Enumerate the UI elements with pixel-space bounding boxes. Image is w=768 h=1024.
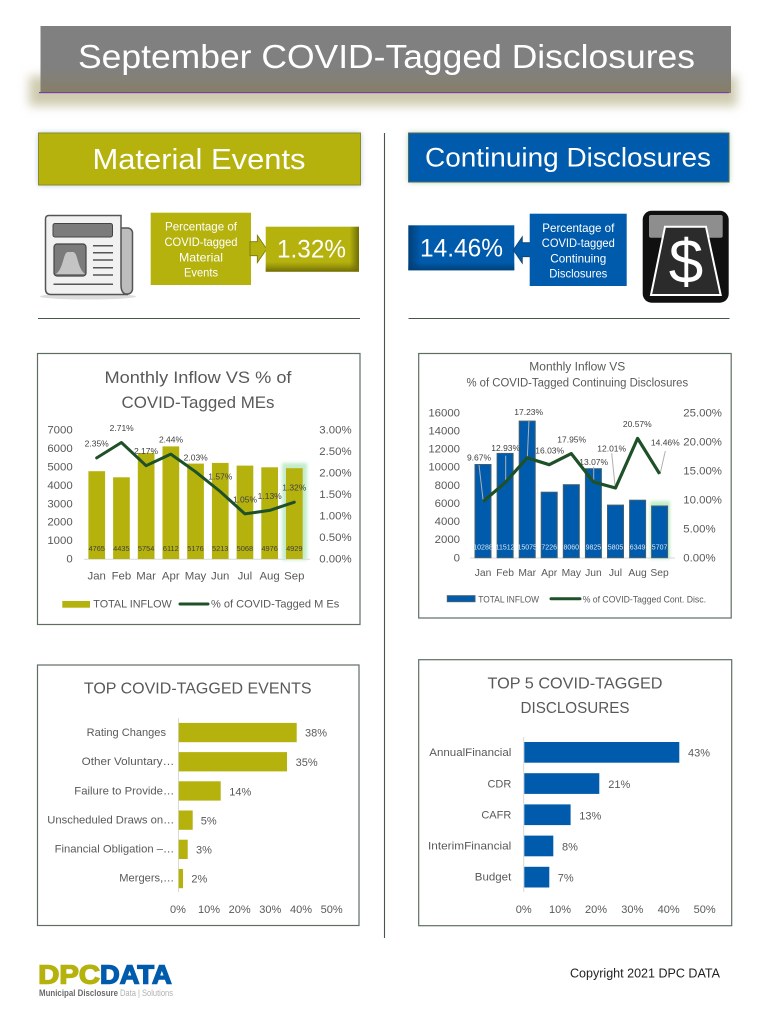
right axis: 15.00% <box>683 465 722 477</box>
right axis: 0.00% <box>683 552 716 564</box>
logo: DPC DATA: DATA <box>100 960 172 990</box>
section heading: Material Events: Material Events <box>92 144 306 176</box>
month labels: Feb <box>496 568 514 579</box>
line values: 20.57% <box>623 419 652 429</box>
category labels: Failure to Provide… <box>74 785 174 797</box>
month labels: Apr <box>162 570 180 582</box>
x axis: 0% <box>516 904 532 916</box>
bar values: 3% <box>196 844 212 856</box>
x axis: 30% <box>259 904 282 916</box>
callout: 14.46% <box>408 225 514 270</box>
chart title: TOP 5 COVID-TAGGED <box>488 675 662 692</box>
text block: percentage of COVID-tagged continuing disclosures: Percentage of <box>542 221 615 235</box>
month labels: Mar <box>518 568 537 579</box>
leader lines <box>479 420 665 502</box>
x axis: 30% <box>621 904 644 916</box>
left axis: 14000 <box>428 425 460 437</box>
category labels: Budget <box>475 872 511 884</box>
x axis: 50% <box>694 904 716 916</box>
x axis: 20% <box>585 904 607 916</box>
month labels: Jun <box>211 570 229 582</box>
month labels: Aug <box>259 570 280 582</box>
category labels: Financial Obligation –… <box>55 844 174 856</box>
bar values <box>191 728 327 886</box>
line values: 12.01% <box>597 443 627 453</box>
chart title <box>104 368 292 412</box>
month labels: Jun <box>585 568 602 579</box>
callout: 14.46%: 14.46% <box>420 235 503 263</box>
bar values: 11512 <box>496 544 515 551</box>
bar values: 5754 <box>138 544 154 553</box>
left axis: 5000 <box>47 461 73 473</box>
month labels: Jul <box>238 570 252 582</box>
September highlight <box>282 463 307 560</box>
right axis: 25.00% <box>683 407 722 419</box>
bar values: 5068 <box>237 544 253 553</box>
bar values <box>473 544 667 551</box>
left axis: 2000 <box>435 534 460 546</box>
month labels: Sep <box>650 568 669 579</box>
bars <box>524 742 679 888</box>
text block: percentage of COVID-tagged continuing disclosures: COVID-tagged <box>542 236 615 250</box>
bar values: 5213 <box>212 544 228 553</box>
left axis: 10000 <box>428 462 460 474</box>
category labels <box>47 727 174 885</box>
month labels: Jan <box>88 570 106 582</box>
category labels: Unscheduled Draws on… <box>47 815 174 827</box>
bar values: 38% <box>305 728 327 740</box>
logo: DPC DATA: DPC <box>38 960 100 990</box>
arrow: to continuing disclosures value <box>513 237 531 263</box>
left axis: 3000 <box>47 498 73 510</box>
callout: 1.32%: 1.32% <box>277 236 346 264</box>
right axis: 20.00% <box>683 436 722 448</box>
panel: monthly inflow vs % of COVID-tagged MEs <box>38 354 360 624</box>
left axis <box>47 425 73 566</box>
line values: 12.93% <box>491 443 521 453</box>
callout: 1.32% <box>266 227 359 272</box>
chart title: COVID-Tagged MEs <box>122 393 274 412</box>
text block: percentage of COVID-tagged material events <box>151 213 251 285</box>
chart title <box>466 361 688 389</box>
left axis: 6000 <box>47 443 73 455</box>
panel: monthly inflow vs % of COVID-tagged continuing disclosures <box>419 354 731 618</box>
bar values: 15075 <box>517 544 537 551</box>
bar values: 8% <box>562 841 578 853</box>
line values: 14.46% <box>651 438 680 448</box>
line values: 1.05% <box>233 494 257 504</box>
x axis: 40% <box>290 904 312 916</box>
bar values: 35% <box>296 757 318 769</box>
month labels: Apr <box>541 568 558 579</box>
text block: percentage of COVID-tagged material events: Events <box>184 266 218 280</box>
category labels: Rating Changes <box>87 727 166 739</box>
title banner: September COVID-Tagged Disclosures <box>78 39 695 76</box>
icon: dollar document in slot <box>643 211 729 303</box>
line values: 16.03% <box>535 445 565 455</box>
line values: 13.07% <box>579 457 609 467</box>
month labels: May <box>185 570 207 582</box>
section heading: Material Events <box>38 133 360 185</box>
bar values: 5805 <box>608 544 623 551</box>
category labels: InterimFinancial <box>428 841 511 853</box>
legend <box>62 599 340 611</box>
panel: top COVID-tagged events <box>38 665 359 926</box>
right axis: 1.50% <box>319 489 352 501</box>
bar values: 13% <box>579 810 602 822</box>
bars: total inflow <box>475 421 668 558</box>
right axis: 0.00% <box>319 554 352 566</box>
chart title: DISCLOSURES <box>520 700 630 717</box>
x axis: 0% <box>170 904 186 916</box>
right axis <box>683 407 722 564</box>
category labels: Mergers,… <box>119 873 174 885</box>
left axis: 8000 <box>435 480 460 492</box>
right axis: 2.00% <box>319 468 352 480</box>
bar values: 8060 <box>564 544 579 551</box>
left axis <box>428 407 460 564</box>
bar values: 43% <box>688 748 710 760</box>
line values <box>467 407 680 467</box>
text block: percentage of COVID-tagged material events: COVID-tagged <box>164 235 238 249</box>
line values: 2.71% <box>110 423 134 433</box>
month labels: Sep <box>284 570 304 582</box>
legend: TOTAL INFLOW <box>93 599 172 611</box>
line values: 1.32% <box>282 483 307 493</box>
line: % of COVID-tagged MEs <box>97 442 294 514</box>
text block: percentage of COVID-tagged continuing disclosures: Continuing <box>550 251 606 265</box>
legend <box>447 594 706 604</box>
bar values: 9825 <box>586 544 601 551</box>
chart title: % of COVID-Tagged Continuing Disclosures <box>466 377 688 389</box>
logo: DPC DATA <box>38 960 173 999</box>
chart title: Monthly Inflow VS % of <box>104 368 292 387</box>
month labels: Mar <box>136 570 156 582</box>
bar values: 6349 <box>630 544 645 551</box>
right axis: 5.00% <box>683 523 716 535</box>
left axis: 0 <box>454 552 460 564</box>
bar values: 4765 <box>88 544 105 553</box>
left axis: 4000 <box>47 480 73 492</box>
panel: top 5 COVID-tagged disclosures <box>419 660 732 926</box>
x axis: 40% <box>658 904 680 916</box>
left axis: 16000 <box>428 407 460 419</box>
logo: DPC DATA: Municipal Disclosure <box>39 988 118 999</box>
x axis: 10% <box>198 904 220 916</box>
bar values: 5707 <box>652 544 667 551</box>
month labels <box>88 570 304 582</box>
right axis: 10.00% <box>683 494 722 506</box>
x axis: 10% <box>549 904 571 916</box>
line values: 17.23% <box>514 407 544 417</box>
left axis: 2000 <box>47 517 73 529</box>
copyright: Copyright 2021 DPC DATA <box>570 967 721 981</box>
left axis: 4000 <box>435 516 460 528</box>
legend: % of COVID-Tagged Cont. Disc. <box>583 594 706 604</box>
line values: 2.35% <box>85 439 109 449</box>
left axis: 6000 <box>435 498 460 510</box>
bar values: 5% <box>201 815 217 827</box>
bar values: 5176 <box>187 544 204 553</box>
line values: 1.57% <box>208 472 233 482</box>
category labels: CAFR <box>481 810 511 822</box>
right axis: 3.00% <box>319 425 352 437</box>
chart title: Monthly Inflow VS <box>529 361 626 373</box>
bars: total inflow <box>88 446 303 559</box>
icon: dollar document in slot: $ <box>669 228 703 297</box>
bar values <box>88 544 303 553</box>
left axis: 12000 <box>428 443 460 455</box>
bar values: 6112 <box>163 544 179 553</box>
section heading: Continuing Disclosures: Continuing Disclosures <box>425 143 711 173</box>
legend: % of COVID-Tagged M Es <box>211 599 340 611</box>
text block: percentage of COVID-tagged material events: Percentage of <box>165 220 238 234</box>
September highlight <box>650 501 670 559</box>
x axis: 20% <box>229 904 251 916</box>
left axis: 1000 <box>47 535 73 547</box>
category labels: AnnualFinancial <box>429 747 511 759</box>
month labels: Feb <box>112 570 131 582</box>
month labels: Aug <box>628 568 647 579</box>
left axis: 0 <box>66 554 73 566</box>
text block: percentage of COVID-tagged material events: Material <box>179 250 223 264</box>
dividers <box>38 133 730 938</box>
bar values: 4929 <box>286 544 303 553</box>
bar values: 7226 <box>541 544 557 551</box>
bar values: 4435 <box>113 544 130 553</box>
bar values: 2% <box>191 874 207 886</box>
month labels: May <box>562 568 582 579</box>
bar values: 7% <box>558 872 574 884</box>
chart title <box>488 675 662 717</box>
month labels <box>475 568 669 579</box>
category labels: Other Voluntary… <box>82 756 174 768</box>
bar values: 4976 <box>261 544 278 553</box>
bar values: 10288 <box>473 544 493 551</box>
text block: percentage of COVID-tagged continuing disclosures: Disclosures <box>549 267 607 281</box>
section heading: Continuing Disclosures <box>408 133 729 182</box>
left axis: 7000 <box>47 425 73 437</box>
bars <box>179 723 297 888</box>
x axis <box>170 904 343 916</box>
month labels: Jan <box>475 568 492 579</box>
month labels: Jul <box>609 568 622 579</box>
line values: 2.17% <box>134 446 158 456</box>
line values: 17.95% <box>557 435 587 445</box>
line: % of COVID-tagged continuing disclosures <box>483 438 660 502</box>
line values: 2.44% <box>159 435 183 445</box>
right axis <box>319 425 352 566</box>
chart title: TOP COVID-TAGGED EVENTS <box>84 680 312 697</box>
line values: 1.13% <box>258 491 282 501</box>
line values: 9.67% <box>467 453 491 463</box>
x axis: 50% <box>321 904 343 916</box>
legend: TOTAL INFLOW <box>478 594 539 604</box>
icon: newspaper <box>40 216 136 300</box>
arrow: to material events value <box>250 235 267 263</box>
right axis: 0.50% <box>319 532 352 544</box>
category labels: CDR <box>487 778 511 790</box>
line values: 2.03% <box>184 452 208 462</box>
right axis: 1.00% <box>319 511 352 523</box>
text block: percentage of COVID-tagged continuing disclosures <box>530 214 627 286</box>
right axis: 2.50% <box>319 446 352 458</box>
title banner <box>29 26 737 106</box>
category labels <box>428 747 511 884</box>
logo: DPC DATA: Data | Solutions <box>120 988 173 999</box>
x axis <box>516 904 716 916</box>
bar values: 14% <box>229 786 252 798</box>
line values <box>85 423 307 504</box>
bar values <box>558 748 710 884</box>
bar values: 21% <box>608 779 631 791</box>
